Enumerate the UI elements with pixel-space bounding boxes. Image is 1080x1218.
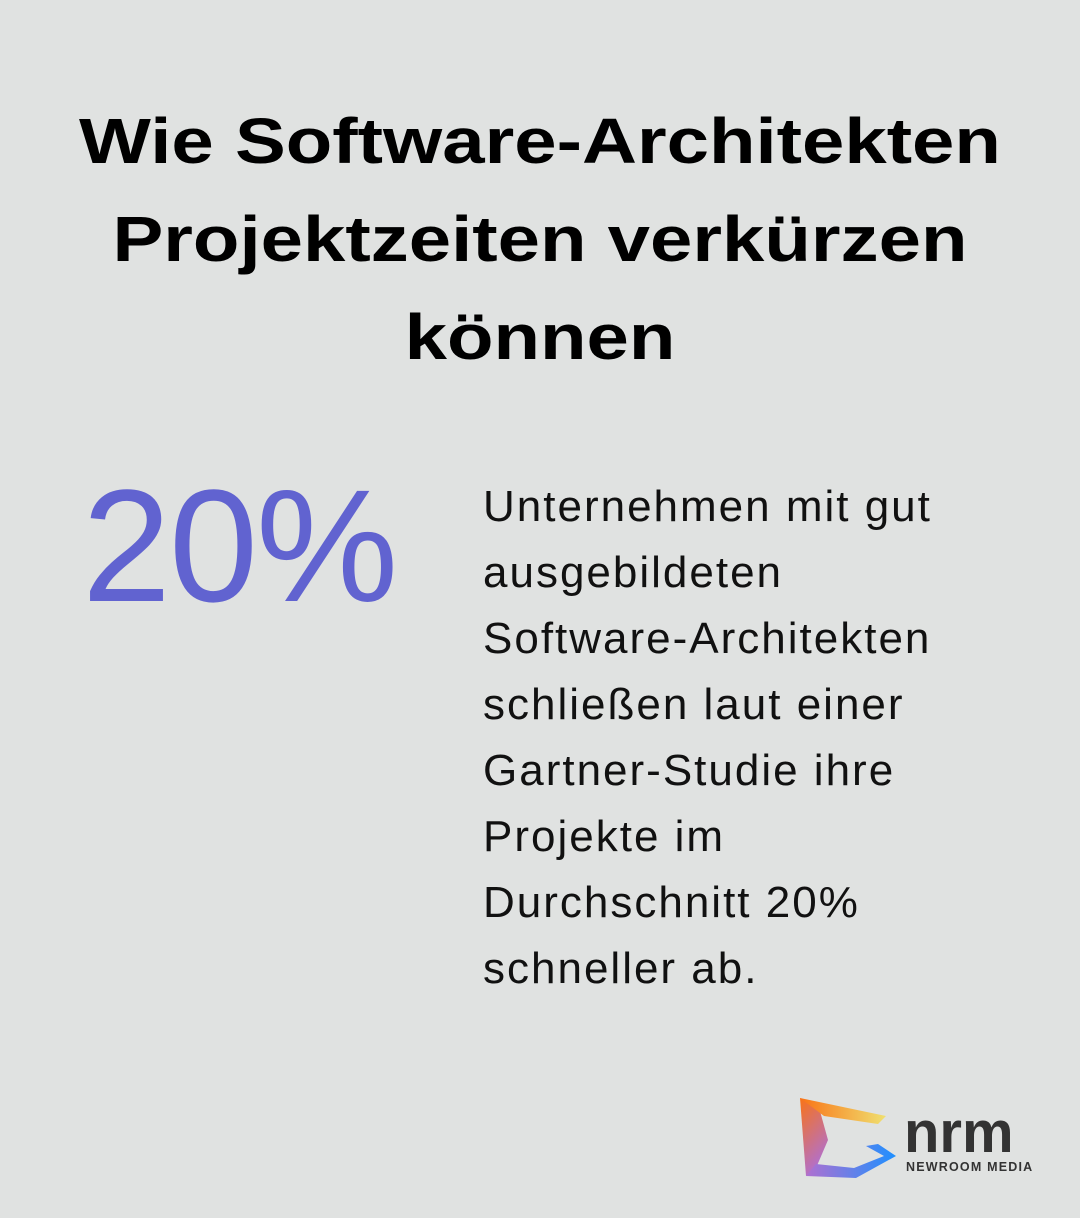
description text: Gartner-Studie ihre — [483, 746, 895, 795]
description text: Software-Architekten — [483, 614, 931, 663]
description text: Unternehmen mit gut — [483, 482, 932, 531]
description text: Projekte im — [483, 812, 725, 861]
description text: schließen laut einer — [483, 680, 905, 729]
title — [79, 105, 1001, 373]
description text: Durchschnitt 20% — [483, 878, 860, 927]
title: Wie Software-Architekten — [79, 105, 1001, 177]
title: Projektzeiten verkürzen — [112, 203, 968, 275]
logo: nrm: NEWROOM MEDIA — [906, 1160, 1033, 1174]
logo: nrm — [800, 1098, 1033, 1178]
description text — [483, 482, 932, 993]
title: können — [405, 301, 675, 373]
stat number: 20% — [82, 456, 396, 635]
logo: nrm: nrm — [904, 1100, 1014, 1165]
description text: schneller ab. — [483, 944, 758, 993]
description text: ausgebildeten — [483, 548, 783, 597]
